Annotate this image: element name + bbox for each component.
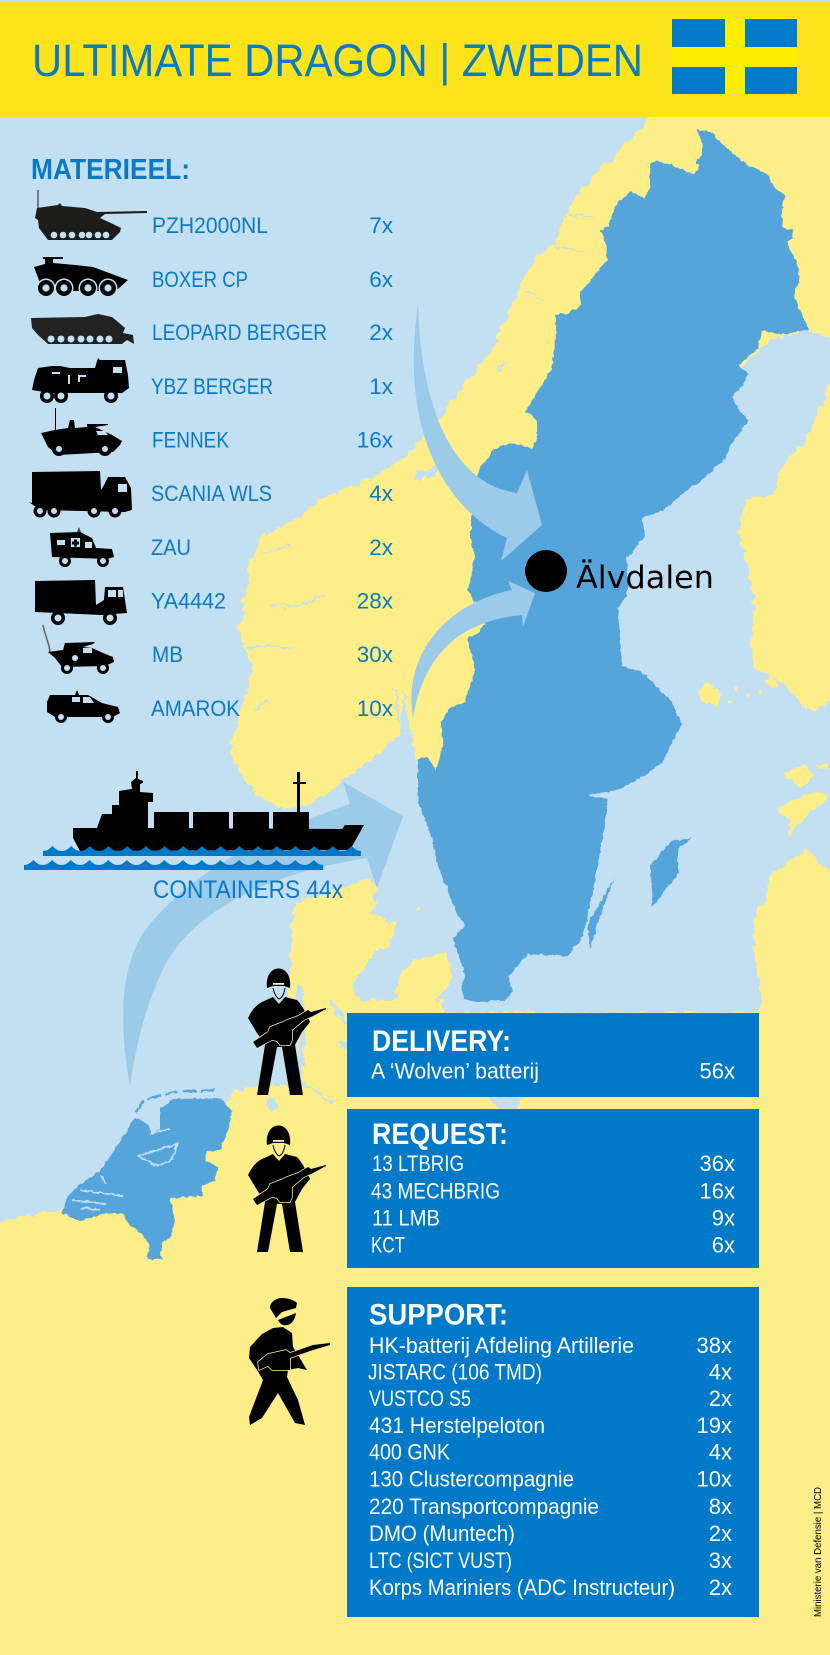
row: Boxer CP [152,267,394,292]
support rows: LTC (SICT VUST) [369,1548,512,1573]
request rows: 43 MECHBRIG [371,1178,500,1203]
support rows: 10x [697,1466,732,1492]
row: Wolven batterij: A ‘Wolven’ batterij [371,1058,539,1084]
row: Fennek: 16x [357,428,394,452]
icon: Leopard Berger [31,314,134,344]
row: MB: 30x [357,642,394,667]
arrow: from the Netherlands across the sea [123,782,403,1086]
icon: container ship [24,771,364,870]
row: YA4442 [151,588,394,614]
support rows: HK-batterij Afdeling Artillerie [369,1333,634,1358]
row: PZH2000NL: PZH2000NL [152,213,268,238]
fjords and inlets [247,214,595,1104]
materieel list [151,213,394,721]
location marker: Alvdalen [525,550,714,596]
arrow: north route to Alvdalen [414,304,542,561]
row: MB: MB [152,642,183,667]
row: Leopard Berger: 2x [369,320,394,345]
land: Finland [738,379,830,709]
Gotland [650,838,692,907]
row: Leopard Berger: LEOPARD BERGER [152,320,327,345]
request rows: 9x [712,1206,735,1231]
row: YBZ Berger: YBZ BERGER [151,374,273,399]
row: Wolven batterij [371,1058,735,1084]
land: Zealand [397,952,452,1013]
icon: soldier request [248,1126,326,1252]
Swedish islands and mainland [62,130,809,1259]
land: Norway and the northern mainland [230,90,830,809]
support rows: VUSTCO S5 [369,1386,471,1411]
support rows: 2x [709,1575,732,1600]
icon: MB vehicle [43,625,114,674]
title: ULTIMATE DRAGON | ZWEDEN [32,35,643,86]
panel: request [347,1109,759,1268]
row: YA4442: 28x [357,588,394,614]
request rows: 13 LTBRIG [372,1151,464,1176]
request rows [371,1151,735,1257]
support rows: 8x [709,1494,732,1519]
icon: YBZ Berger [32,358,129,403]
land: Baltic islands [418,676,828,1012]
row: Amarok [151,696,394,721]
row: Boxer CP: 6x [369,267,394,292]
icon: soldier delivery [248,968,326,1095]
row: Amarok: AMAROK [151,696,240,721]
heading: request: REQUEST: [372,1118,508,1151]
support rows: DMO (Muntech) [369,1521,515,1546]
Sweden [418,130,809,1002]
row: PZH2000NL [152,213,394,238]
heading: materieel: MATERIEEL: [31,154,190,186]
row: Amarok: 10x [357,696,394,721]
request rows: 36x [700,1151,735,1176]
support rows: 3x [709,1548,732,1573]
support rows: JISTARC (106 TMD) [368,1360,542,1384]
row: Fennek [152,428,394,452]
row: YBZ Berger: 1x [369,374,394,399]
icon: Boxer [34,257,128,298]
land: Denmark, Germany, Baltics and lower mainland [0,850,830,1655]
location marker: Alvdalen: Älvdalen [576,560,714,596]
icon: Scania WLS [29,471,132,518]
icon: Amarok [47,690,120,723]
row: YBZ Berger [151,374,394,399]
heading: delivery: DELIVERY: [372,1025,511,1058]
row: ZAU: 2x [369,535,394,560]
panel: delivery [347,1013,759,1097]
row: Wolven batterij: 56x [700,1058,735,1084]
arrow: west route to Alvdalen [411,581,535,718]
waves [24,846,361,870]
support rows: 19x [697,1413,732,1438]
row: ZAU [151,535,394,560]
row: ZAU: ZAU [151,535,191,560]
icon: Fennek [41,408,122,456]
row: Scania WLS [151,481,394,506]
heading: support: SUPPORT: [369,1299,508,1332]
support rows: 130 Clustercompagnie [369,1466,574,1492]
panel: support [347,1287,759,1617]
row: Boxer CP: BOXER CP [152,267,248,292]
row: Scania WLS: SCANIA WLS [151,481,272,506]
label: containers: CONTAINERS 44x [153,876,343,904]
support rows: 220 Transportcompagnie [369,1494,599,1519]
support rows: 400 GNK [369,1440,450,1464]
Netherlands [62,1090,232,1259]
Oland [588,877,615,950]
request rows: 16x [700,1178,735,1203]
support rows: Korps Mariniers (ADC Instructeur) [369,1575,675,1600]
request rows: 6x [712,1232,735,1257]
row: YA4442: YA4442 [151,588,226,614]
row: Scania WLS: 4x [369,481,394,506]
icon: ZAU ambulance [50,527,114,567]
row: Fennek: FENNEK [152,428,229,452]
credit: Ministerie van Defensie | MCD [812,1487,824,1617]
support rows: 4x [709,1360,732,1384]
support rows: 431 Herstelpeloton [369,1413,545,1438]
Swedish flag [672,18,797,94]
row: PZH2000NL: 7x [369,213,394,238]
icon: PZH2000 howitzer [35,190,147,240]
support rows: 2x [709,1521,732,1546]
support rows: 2x [709,1386,732,1411]
support rows: 38x [697,1333,732,1358]
request rows: KCT [371,1232,405,1257]
row: MB [152,642,394,667]
header band [0,1,830,117]
request rows: 11 LMB [372,1206,440,1231]
icon: soldier support [249,1298,330,1425]
icon: YA4442 truck [35,580,127,625]
support rows: 4x [709,1440,732,1464]
support rows [368,1333,732,1600]
